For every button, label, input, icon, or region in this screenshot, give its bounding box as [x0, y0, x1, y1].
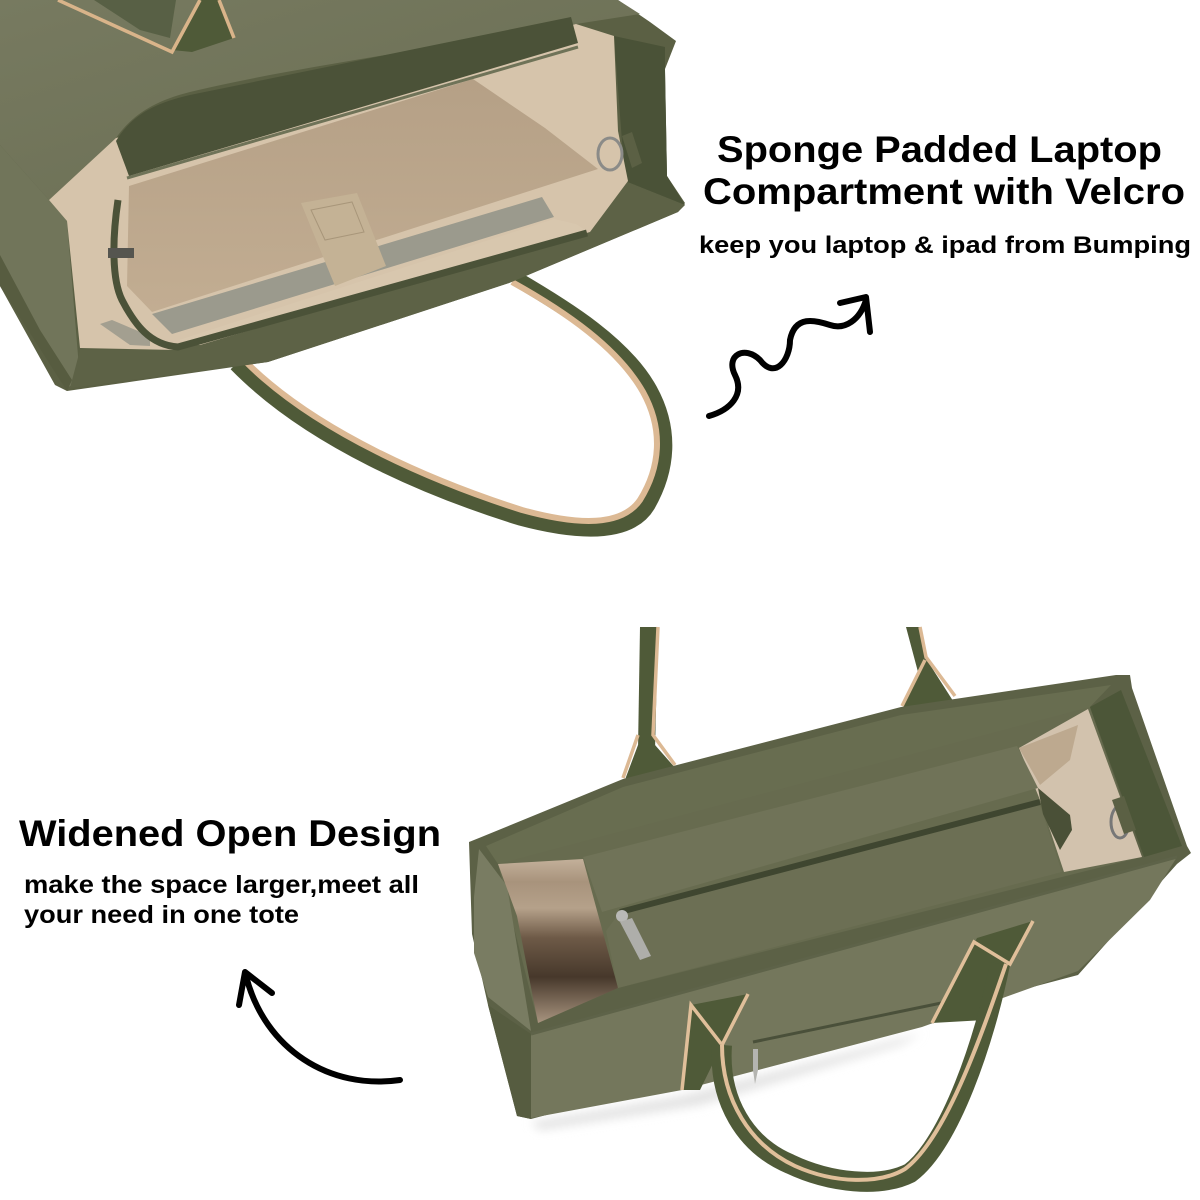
left side panel [0, 145, 80, 388]
left side panel [474, 849, 531, 1031]
right inner wall [1090, 690, 1182, 857]
velcro tab [301, 193, 386, 286]
front strap stubs [682, 921, 1033, 1090]
front handle [722, 964, 1006, 1182]
shoulder strap [236, 278, 665, 529]
soft shadow [531, 1033, 922, 1130]
subheading: open design: make the space larger,meet all [24, 871, 419, 899]
front panel [520, 857, 1177, 1118]
laptop [152, 197, 554, 334]
top handle stub [58, 0, 234, 52]
right folded lining [1019, 725, 1078, 785]
front panel top edge [531, 857, 1177, 1034]
heading: laptop compartment: Sponge Padded Laptop [717, 129, 1162, 170]
zipper curve [114, 200, 587, 347]
pocket end fold [1038, 788, 1072, 850]
subheading: laptop compartment: keep you laptop & ipad from Bumping [699, 232, 1191, 259]
heading: open design: Widened Open Design [19, 813, 441, 854]
front zipper pull [753, 1049, 758, 1084]
inner zipper line [127, 47, 578, 178]
pocket lower [606, 800, 1062, 988]
zipper pull [616, 910, 651, 960]
bottom bag: open top view [469, 627, 1191, 1182]
right D ring [1111, 796, 1136, 838]
top bag: laptop compartment view [0, 0, 685, 529]
back panel [0, 0, 640, 200]
zipper slider [108, 248, 134, 258]
inner pocket dark [116, 17, 578, 176]
front pocket zipper [753, 1001, 951, 1042]
main zipper [620, 802, 1040, 912]
pocket flap [583, 746, 1038, 912]
back handles [623, 627, 955, 785]
arrow: curved to text [239, 972, 400, 1082]
subheading: open design [24, 871, 419, 929]
back panel interior [486, 685, 1111, 864]
bag outer shell [469, 675, 1191, 1119]
left beige compartment [498, 859, 618, 1023]
heading: laptop compartment [703, 129, 1185, 212]
subheading: open design: your need in one tote [24, 901, 299, 929]
D ring [598, 132, 642, 170]
front inner strip [70, 181, 685, 388]
arrow: squiggle to text [709, 297, 870, 416]
interior floor fill [498, 707, 1142, 1023]
left side lower edge [0, 255, 72, 391]
side strip bottom left [488, 1005, 531, 1119]
heading: laptop compartment: Compartment with Velcro [703, 171, 1185, 212]
bag shell [0, 0, 685, 391]
right beige compartment [1019, 709, 1142, 872]
right side wall [614, 36, 685, 205]
lower laptop corner [100, 320, 150, 346]
padded sleeve back [127, 79, 598, 312]
front sleeve [179, 219, 587, 345]
interior beige lining [49, 24, 628, 350]
